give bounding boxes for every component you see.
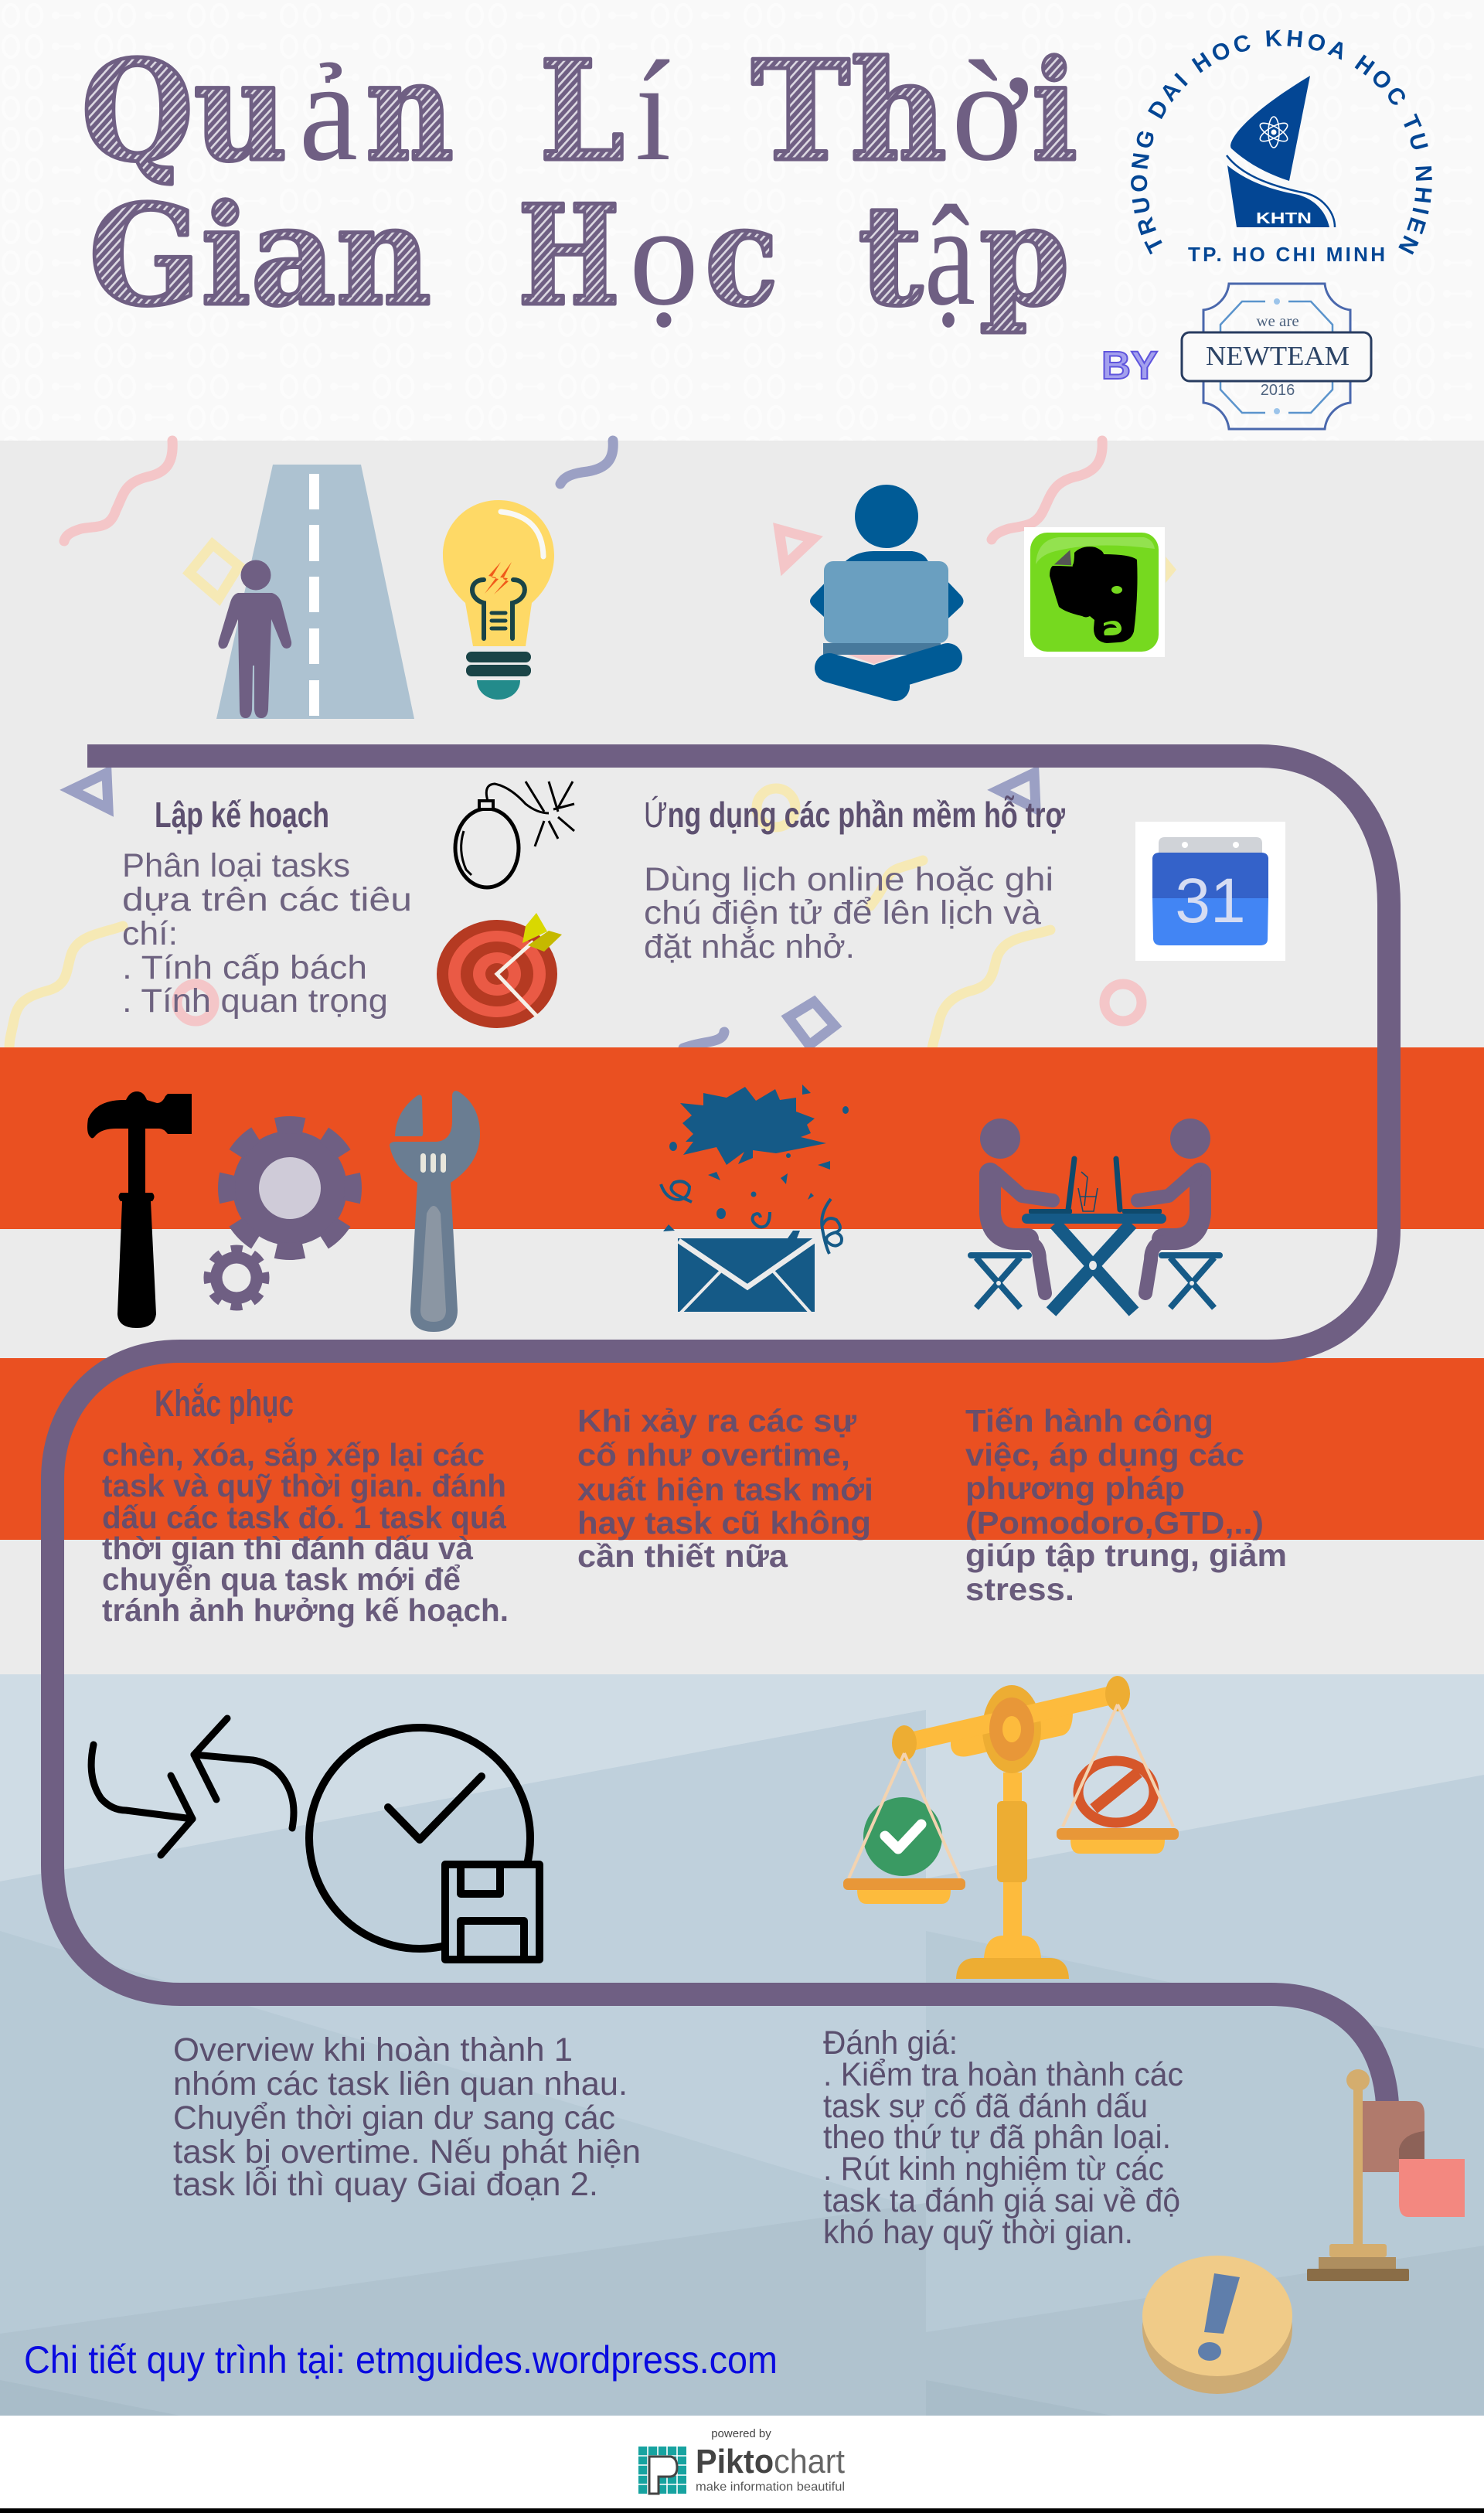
text block: overview: task lỗi thì quay Giai đoạn 2.	[173, 2166, 598, 2203]
left person and stool	[971, 1119, 1053, 1308]
panel: blue evaluation background	[0, 1674, 1484, 2416]
text block: overtime incidents: hay task cũ không	[577, 1505, 871, 1541]
title: ờ	[951, 32, 1029, 191]
footer black bar	[0, 2508, 1484, 2513]
text block: Ứng dụng các phần mềm hỗ trợ: chú điện tử để lên lịch và	[644, 894, 1041, 931]
logo: university emblem: TRUONG DAI HOC KHOA HOC TU NHIEN	[1131, 29, 1432, 255]
icon: Google Calendar	[1135, 822, 1285, 961]
text block: methods: Tiến hành công	[965, 1403, 1213, 1439]
table with laptops	[1022, 1159, 1166, 1312]
logo mark	[638, 2447, 686, 2494]
text block: overview	[173, 2031, 641, 2203]
icon: small gear	[207, 1248, 266, 1307]
panel: orange stripe bottom	[0, 1358, 1484, 1540]
text block: overtime incidents	[577, 1403, 873, 1574]
text block: Khắc phục: chuyển qua task mới để	[102, 1561, 461, 1597]
title	[81, 30, 1077, 336]
icon: flag on stand	[1307, 2069, 1465, 2281]
footer logo: Piktochart: powered by	[711, 2427, 771, 2440]
text block: Khắc phục	[102, 1382, 509, 1628]
icon: road	[216, 465, 414, 719]
link text: Chi tiết quy trình tại: etmguides.wordpress.com	[24, 2338, 778, 2382]
text block: overview: task bị overtime. Nếu phát hiện	[173, 2133, 641, 2171]
text block: Lập kế hoạch: . Tính quan trọng	[122, 982, 388, 1020]
panel: header background	[0, 0, 1484, 441]
text block: Khắc phục: dấu các task đó. 1 task quá	[102, 1500, 506, 1535]
text block: evaluation: . Rút kinh nghiệm từ các	[823, 2150, 1164, 2188]
text block: Lập kế hoạch: Lập kế hoạch	[155, 795, 329, 835]
text block: overtime incidents: cố như overtime,	[577, 1437, 850, 1473]
icon: target	[437, 913, 562, 1028]
text block: Ứng dụng các phần mềm hỗ trợ: Dùng lịch online hoặc ghi	[644, 861, 1053, 898]
text block: evaluation: task ta đánh giá sai về độ	[823, 2182, 1180, 2219]
footer logo: Piktochart	[638, 2427, 845, 2494]
text block: Khắc phục: Khắc phục	[155, 1382, 294, 1425]
text block: overview: Chuyển thời gian dư sang các	[173, 2099, 615, 2137]
text block: Khắc phục: thời gian thì đánh dấu và	[102, 1531, 473, 1566]
icon: redo arrows	[91, 1718, 294, 1855]
badge: we are NEWTEAM 2016	[1182, 284, 1371, 429]
text block: evaluation: . Kiểm tra hoàn thành các	[823, 2056, 1183, 2093]
text block: Lập kế hoạch: . Tính cấp bách	[122, 949, 367, 986]
text block: overtime incidents: xuất hiện task mới	[577, 1472, 873, 1507]
icon: Google Calendar: 31	[1175, 866, 1246, 936]
text block: methods: stress.	[965, 1571, 1074, 1607]
text block: overtime incidents: Khi xảy ra các sự	[577, 1403, 856, 1439]
title: c	[705, 175, 778, 336]
text block: Khắc phục: tránh ảnh hưởng kế hoạch.	[102, 1592, 509, 1628]
title: Gian	[89, 175, 431, 336]
icon: bomb	[455, 781, 574, 887]
text block: evaluation: khó hay quỹ thời gian.	[823, 2214, 1133, 2251]
text block: Khắc phục: task và quỹ thời gian. đánh	[102, 1468, 506, 1503]
text block: Lập kế hoạch: dựa trên các tiêu	[122, 881, 412, 918]
text block: methods: việc, áp dụng các	[965, 1437, 1244, 1473]
title: Th	[751, 30, 947, 192]
process route line	[53, 756, 1389, 2104]
text block: Lập kế hoạch: Phân loại tasks	[122, 847, 350, 884]
text block: methods	[965, 1403, 1287, 1607]
footer logo: Piktochart: make information beautiful	[696, 2481, 845, 2494]
title: ậ	[924, 176, 975, 335]
title: p	[979, 175, 1070, 336]
text block: overview: nhóm các task liên quan nhau.	[173, 2065, 628, 2103]
icon: person with laptop	[810, 485, 963, 686]
right person and stool	[1138, 1119, 1220, 1308]
icon: exclamation coin	[1142, 2256, 1292, 2394]
icon: person on road	[218, 560, 291, 718]
logo: university emblem: KHTN	[1256, 210, 1312, 227]
icon: Evernote logo	[1024, 527, 1165, 657]
icon: two people working at table	[971, 1119, 1220, 1312]
icon: balance scale	[843, 1676, 1179, 1979]
icon: light bulb	[443, 500, 554, 700]
text block: evaluation: task sự cố đã đánh dấu	[823, 2088, 1148, 2125]
text block: Ứng dụng các phần mềm hỗ trợ: đặt nhắc nhở.	[644, 928, 855, 965]
panel: footer	[0, 2416, 1484, 2508]
text block: methods: giúp tập trung, giảm	[965, 1537, 1287, 1573]
badge: we are NEWTEAM 2016: 2016	[1261, 382, 1295, 399]
text block: Lập kế hoạch	[122, 795, 412, 1020]
text block: Ứng dụng các phần mềm hỗ trợ: Ứng dụng các phần mềm hỗ trợ	[644, 795, 1065, 835]
text block: Khắc phục: chèn, xóa, sắp xếp lại các	[102, 1437, 485, 1473]
text block: Lập kế hoạch: chí:	[122, 915, 178, 952]
text block: methods: phương pháp	[965, 1470, 1185, 1506]
title: ọ	[629, 176, 699, 335]
title: i	[1032, 30, 1077, 192]
text block: overview: Overview khi hoàn thành 1	[173, 2031, 573, 2069]
BY label: BY	[1101, 343, 1158, 387]
title: Qu	[81, 30, 288, 192]
panel: orange stripe top	[0, 1047, 1484, 1229]
title: H	[518, 175, 620, 336]
footer logo: Piktochart: Piktochart	[696, 2443, 845, 2481]
title: ả	[299, 32, 358, 191]
icon: wrench	[390, 1091, 480, 1332]
logo: university emblem: TP. HO CHI MINH	[1188, 243, 1385, 266]
icon: clock with check and save disk	[309, 1728, 539, 1960]
text block: evaluation: theo thứ tự đã phân loại.	[823, 2119, 1171, 2156]
title: n	[366, 30, 454, 192]
badge: we are NEWTEAM 2016: we are	[1256, 312, 1299, 330]
text block: Ứng dụng các phần mềm hỗ trợ	[644, 795, 1065, 965]
decorative confetti shapes	[9, 441, 1142, 1048]
title: í	[635, 32, 671, 191]
icon: exploding envelope	[661, 1085, 849, 1313]
title: L	[539, 30, 625, 192]
badge: we are NEWTEAM 2016: NEWTEAM	[1206, 341, 1350, 371]
title: t	[858, 175, 923, 336]
prohibited badge	[1078, 1761, 1154, 1823]
icon: large gear	[226, 1125, 353, 1251]
text block: evaluation: Đánh giá:	[823, 2024, 958, 2062]
text block: methods: (Pomodoro,GTD,..)	[965, 1505, 1264, 1541]
text block: overtime incidents: cần thiết nữa	[577, 1538, 788, 1574]
check mark badge	[863, 1797, 942, 1876]
icon: hammer	[87, 1091, 192, 1328]
text block: evaluation	[823, 2024, 1183, 2251]
panel: grey body background	[0, 441, 1484, 1674]
